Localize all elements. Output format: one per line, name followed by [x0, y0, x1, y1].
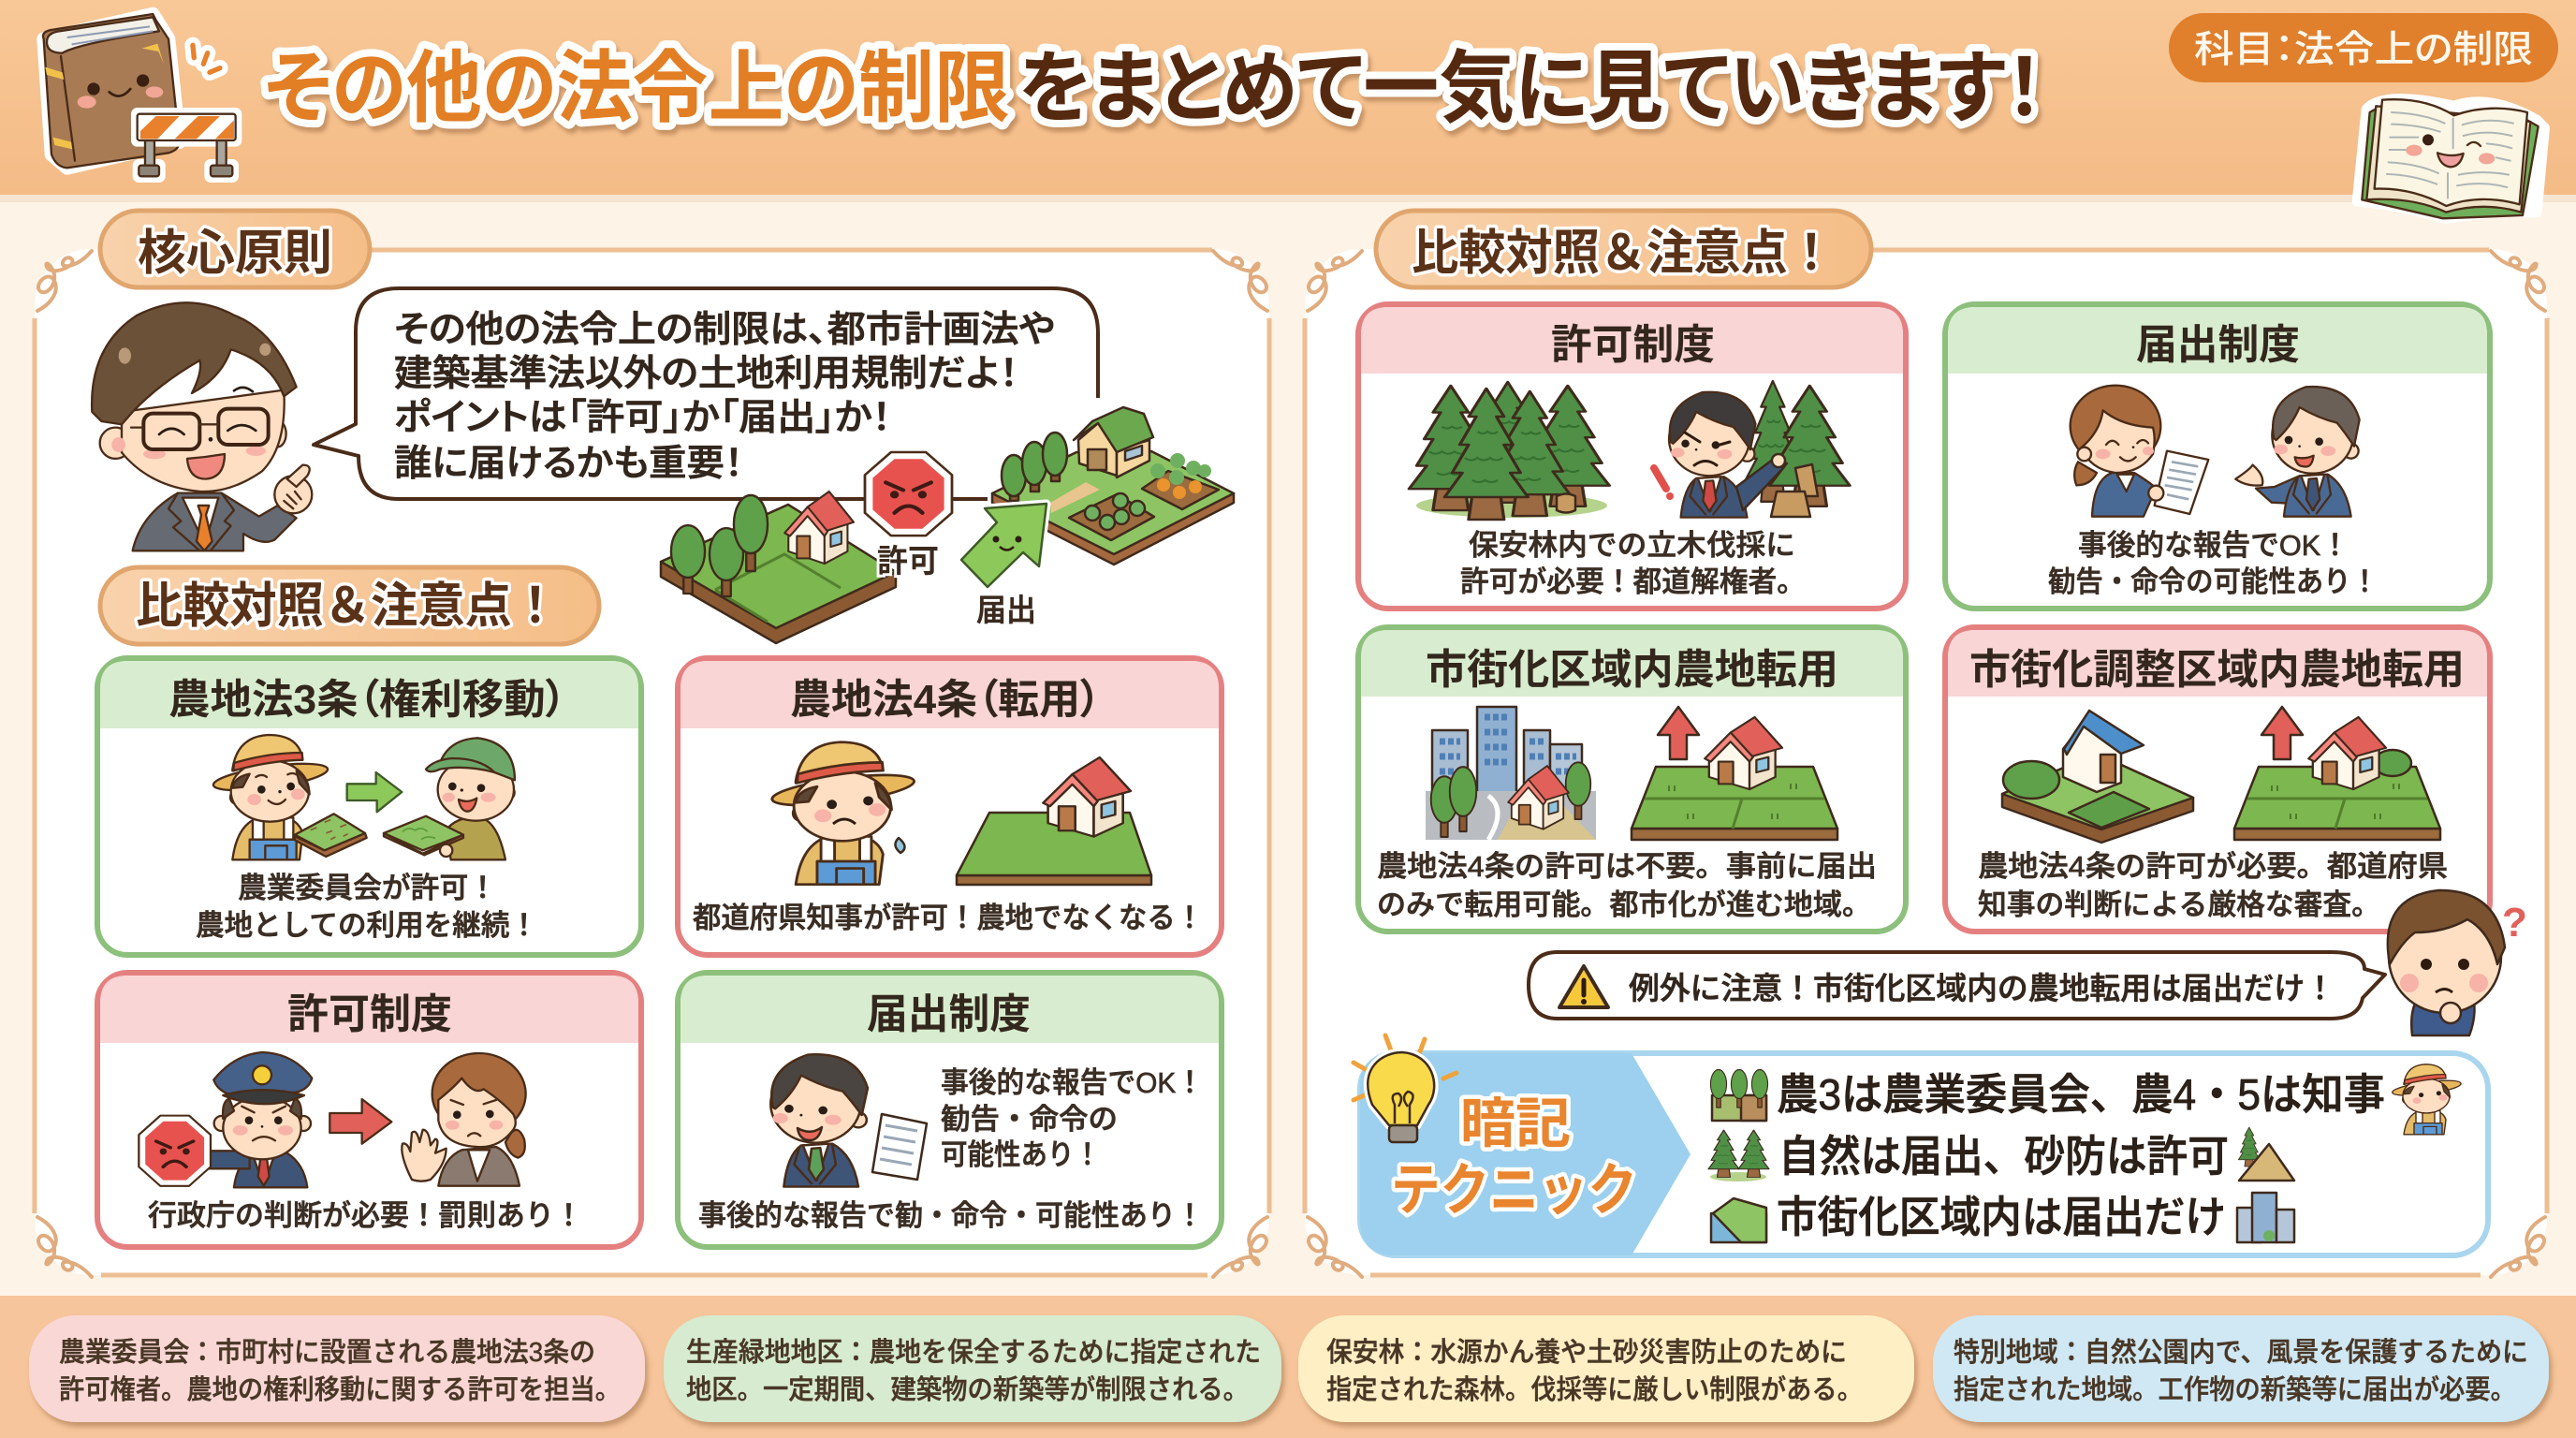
panel: memorization technique: 自然は届出、砂防は許可 [1778, 1132, 2229, 1181]
card: notification system right: 勧告・命令の可能性あり！ [2048, 565, 2378, 598]
icon: lightbulb [1354, 1035, 1456, 1142]
card: permit system right: 保安林内での立木伐採に [1469, 529, 1795, 562]
card: notification system left: 事後的な報告で勧・命令・可能性あり！ [698, 1199, 1204, 1232]
callout: exception warning [1529, 952, 2385, 1019]
character: puzzled boy with question mark [2388, 890, 2527, 1035]
icon: stop sign permit [865, 452, 952, 580]
card: Farmland Act Article 3: 農業委員会が許可！ [238, 872, 497, 904]
card: notification system left: 勧告・命令の [941, 1103, 1118, 1136]
speech bubble: core principle: 建築基準法以外の土地利用規制だよ！ [394, 354, 1018, 394]
illustration: blue house on farmland and house on field [2002, 707, 2440, 843]
speech bubble: core principle: 誰に届けるかも重要！ [394, 444, 743, 484]
illustration: city buildings and house on field [1426, 707, 1837, 840]
illustration: worried farmer and house on field [770, 742, 1151, 885]
heading: core principle [100, 211, 370, 287]
card: permit system left [97, 973, 641, 1247]
speech bubble: core principle: ポイントは「許可」か「届出」か！ [394, 398, 891, 438]
title: その他の法令上の制限 [264, 44, 1010, 132]
icon: two conifers [1708, 1130, 1769, 1181]
illustration: officer stopping a woman [139, 1052, 526, 1187]
icon: book character with road barrier [43, 14, 242, 183]
illustration: man reporting with document [770, 1054, 927, 1187]
card: Farmland Act Article 3: 農地としての利用を継続！ [196, 909, 538, 942]
heading: comparison right [1376, 211, 1871, 287]
speech bubble: core principle: その他の法令上の制限は、都市計画法や [394, 310, 1055, 350]
header band [0, 0, 2576, 202]
icon: green arrow notification [961, 504, 1046, 587]
card: farmland conversion in urbanization control area: 知事の判断による厳格な審査。 [1978, 888, 2380, 921]
illustration: forest and man at cut tree [1409, 381, 1850, 520]
glossary: protection forest [1298, 1315, 1914, 1422]
card: farmland conversion in urbanization control area [1945, 627, 2490, 932]
card: notification system left: 可能性あり！ [941, 1138, 1101, 1171]
subject badge: 科目：法令上の制限 [2194, 29, 2533, 70]
heading: comparison right: 比較対照＆注意点！ [1412, 227, 1835, 281]
card: notification system right [1945, 304, 2490, 609]
callout: exception warning: 例外に注意！市街化区域内の農地転用は届出だけ！ [1629, 971, 2335, 1005]
title: をまとめて一気に見ていきます！ [1018, 44, 2043, 132]
glossary: agricultural committee: 許可権者。農地の権利移動に関する許可を担当。 [59, 1374, 621, 1405]
glossary: special area [1933, 1315, 2549, 1422]
icon: open book character [2357, 99, 2544, 218]
panel: memorization technique: テクニック [1391, 1159, 1637, 1222]
card: permit system right [1358, 304, 1906, 609]
icon: buildings [2237, 1193, 2294, 1242]
card: permit system right: 許可制度 [1551, 322, 1715, 368]
glossary: protection forest: 指定された森林。伐採等に厳しい制限がある。 [1326, 1374, 1863, 1405]
card: permit system left: 許可制度 [287, 991, 452, 1037]
card: notification system left [678, 973, 1222, 1247]
icon: farmer small [2392, 1064, 2462, 1135]
heading: core principle: 核心原則 [138, 227, 332, 281]
card: farmland conversion in urbanization area [1358, 627, 1906, 932]
character: puzzled boy with question mark: ? [2502, 900, 2527, 946]
card: farmland conversion in urbanization area: 農地法4条の許可は不要。事前に届出 [1377, 850, 1877, 883]
card: Farmland Act Article 4 [678, 658, 1222, 955]
footer band [0, 1296, 2576, 1438]
card: permit system right: 許可が必要！都道解権者。 [1460, 565, 1806, 598]
card: Farmland Act Article 4: 農地法4条（転用） [790, 677, 1101, 723]
card: Farmland Act Article 4: 都道府県知事が許可！農地でなくなる！ [693, 902, 1204, 934]
panel: memorization technique: 農3は農業委員会、農4・5は知事 [1777, 1070, 2385, 1119]
card: farmland conversion in urbanization control area: 市街化調整区域内農地転用 [1969, 647, 2465, 693]
panel: memorization technique: 市街化区域内は届出だけ [1777, 1193, 2226, 1241]
card: farmland conversion in urbanization control area: 農地法4条の許可が必要。都道府県 [1978, 850, 2448, 883]
icon: stop sign permit: 許可 [877, 544, 939, 580]
glossary: special area: 指定された地域。工作物の新築等に届出が必要。 [1954, 1374, 2516, 1405]
glossary: protection forest: 保安林：水源かん養や土砂災害防止のために [1326, 1337, 1847, 1368]
illustration: farm with barn and vegetable plots [990, 398, 1234, 565]
card: farmland conversion in urbanization area: のみで転用可能。都市化が進む地域。 [1377, 888, 1871, 921]
glossary: special area: 特別地域：自然公園内で、風景を保護するために [1954, 1337, 2528, 1368]
panel: left core principles and comparison [35, 249, 1269, 1277]
title [264, 44, 2043, 132]
illustration: farmers handing over land [212, 735, 515, 859]
glossary: productive green zone: 地区。一定期間、建築物の新築等が制限される。 [686, 1374, 1249, 1405]
icon: conifer and sand mound [2238, 1127, 2294, 1181]
character: teacher with glasses [92, 302, 312, 550]
glossary: agricultural committee: 農業委員会：市町村に設置される農地法3条の [59, 1337, 595, 1368]
card: notification system right: 事後的な報告でOK！ [2078, 529, 2349, 562]
icon: warning triangle [1559, 966, 1608, 1007]
card: Farmland Act Article 3: 農地法3条（権利移動） [168, 677, 566, 723]
card: Farmland Act Article 3 [97, 658, 641, 955]
heading: comparison left [100, 567, 599, 644]
glossary: agricultural committee [29, 1315, 645, 1422]
card: farmland conversion in urbanization area: 市街化区域内農地転用 [1426, 647, 1838, 693]
card: notification system left: 届出制度 [867, 991, 1031, 1037]
speech bubble: core principle [314, 288, 1098, 499]
card: notification system left: 事後的な報告でOK！ [941, 1066, 1204, 1099]
illustration: woman with document and man [2071, 386, 2360, 517]
panel: memorization technique [1354, 1035, 2488, 1255]
heading: comparison left: 比較対照＆注意点！ [136, 580, 559, 634]
glossary: productive green zone: 生産緑地地区：農地を保全するために指定された [686, 1337, 1261, 1368]
subject badge [2169, 13, 2558, 82]
illustration: farm with house [661, 492, 896, 643]
panel: memorization technique: 暗記 [1460, 1093, 1571, 1154]
icon: landscape [1711, 1198, 1766, 1242]
icon: trees over plots [1710, 1069, 1768, 1121]
card: permit system left: 行政庁の判断が必要！罰則あり！ [148, 1199, 583, 1232]
panel: right comparison [1305, 249, 2547, 1277]
glossary: productive green zone [664, 1315, 1281, 1422]
card: notification system right: 届出制度 [2136, 322, 2300, 368]
label: notification: 届出 [976, 593, 1036, 627]
